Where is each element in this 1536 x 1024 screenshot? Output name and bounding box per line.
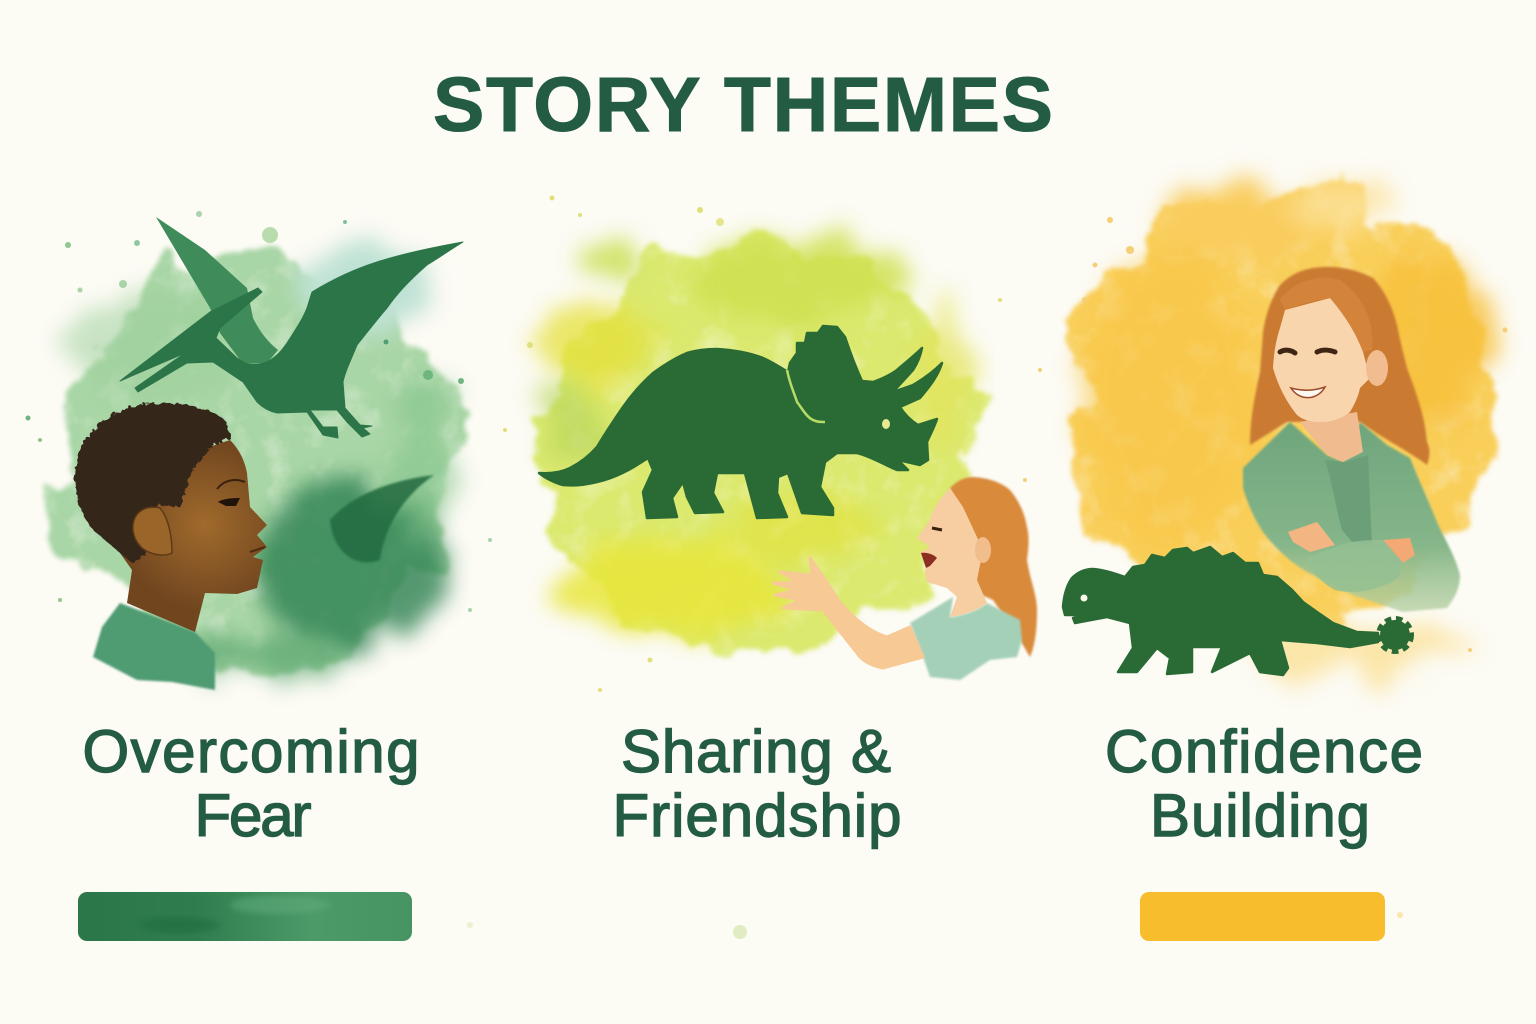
girl neck xyxy=(1300,412,1363,462)
girl face xyxy=(1273,298,1370,422)
girl forearm xyxy=(1306,540,1403,592)
illustration: girl with folded arms xyxy=(1243,267,1460,612)
girl hair xyxy=(950,477,1037,657)
label: Building xyxy=(1150,782,1370,849)
watercolor wash: green xyxy=(26,211,492,679)
boy shirt xyxy=(93,603,215,690)
boy hair xyxy=(75,403,230,563)
girl face xyxy=(917,488,987,617)
girl eyes xyxy=(1280,350,1335,353)
boy mouth xyxy=(250,547,265,552)
girl mouth xyxy=(921,553,937,568)
illustration: boy in profile xyxy=(75,403,267,690)
girl inner shirt and vest shadow xyxy=(1325,455,1372,545)
label: Friendship xyxy=(612,782,902,849)
icon: ankylosaurus silhouette xyxy=(1063,547,1410,675)
triceratops eye xyxy=(882,419,890,429)
label: Confidence xyxy=(1105,718,1423,785)
title: STORY THEMES xyxy=(433,62,1053,148)
girl smile xyxy=(1291,387,1325,398)
panel: overcoming fear xyxy=(26,211,492,941)
girl hair xyxy=(1250,267,1429,465)
girl eye xyxy=(932,528,942,530)
panel: confidence building xyxy=(1023,180,1508,941)
label: Overcoming xyxy=(82,718,420,785)
label: Sharing & xyxy=(621,718,891,785)
girl hands xyxy=(1288,522,1415,563)
watercolor wash: orange-yellow xyxy=(1023,180,1508,918)
icon: triceratops silhouette xyxy=(539,326,942,518)
frill line xyxy=(787,370,825,422)
boy ear xyxy=(133,507,172,555)
tail club xyxy=(1380,620,1410,650)
girl arm and hand xyxy=(773,558,923,668)
girl ear xyxy=(975,537,991,563)
girl shirt xyxy=(910,597,1022,680)
boy head and neck xyxy=(120,440,267,632)
illustration: girl reaching xyxy=(773,477,1037,680)
boy eye and brow xyxy=(217,480,245,506)
watercolor wash: yellow-green xyxy=(467,196,1002,939)
bar: yellow xyxy=(1140,892,1385,941)
girl shirt xyxy=(1243,422,1460,612)
bar: green xyxy=(78,892,412,941)
label: Fear xyxy=(194,782,312,849)
ankylosaurus eye xyxy=(1080,594,1088,602)
icon: pterosaur silhouette xyxy=(120,242,463,438)
girl ear xyxy=(1366,350,1388,386)
panel: sharing and friendship xyxy=(467,196,1037,939)
icon: pterosaur back wing xyxy=(156,217,278,364)
icon: distant pterosaur wing xyxy=(330,475,434,562)
girl fringe xyxy=(1280,278,1372,352)
